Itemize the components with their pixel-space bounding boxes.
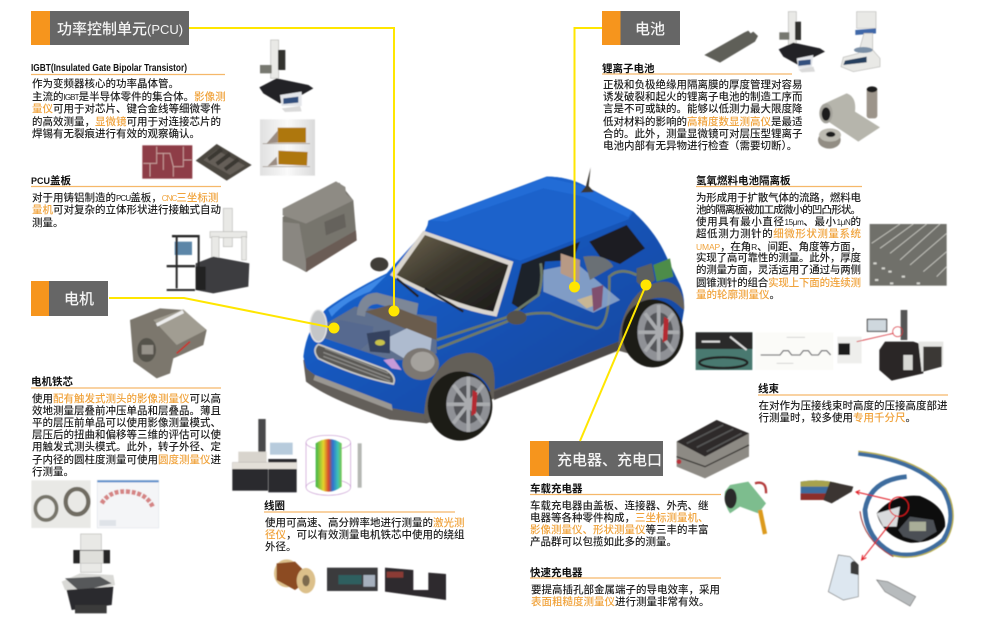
section: battery — [569, 11, 947, 301]
on-board charger in car — [637, 258, 673, 288]
harness subheading: 线束 — [758, 382, 779, 395]
leader line: battery — [569, 28, 602, 292]
fuel cell text: UMAP，在角R、间距、角度等方面， — [696, 240, 861, 253]
fuel cell text: 量的轮廓测量仪。 — [696, 288, 780, 301]
side mirror — [507, 311, 527, 325]
lithium ion text: 电池内部有无异物进行检查（需要切断）。 — [603, 139, 797, 152]
solder image — [260, 119, 315, 176]
coil text: 使用可高速、高分辨率地进行测量的激光测 — [265, 516, 464, 529]
separator roll — [819, 93, 880, 142]
IGBT text: 作为变频器核心的功率晶体管。 — [32, 77, 179, 90]
motor core subheading: 电机铁芯 — [31, 375, 73, 388]
PCU cover text: 量机可对复杂的立体形状进行接触式自动 — [32, 203, 221, 216]
PCU cover text: 对于用铸铝制造的PCU盖板，CNC三坐标测 — [32, 191, 218, 204]
contour gauge photo — [696, 332, 752, 370]
hood highlight — [328, 275, 387, 317]
charger unit — [677, 420, 749, 478]
onboard charger text: 电器等各种零件构成，三坐标测量机、 — [530, 511, 708, 524]
vision measuring machine — [62, 534, 115, 613]
wipers — [397, 278, 463, 312]
lithium ion text: 诱发破裂和起火的锂离子电池的制造工序而 — [603, 90, 802, 103]
icons: battery images — [704, 12, 947, 286]
coil text — [265, 516, 465, 553]
microscope — [779, 12, 825, 72]
fuel cell text: 实现了高可靠性的测量。此外，厚度 — [696, 251, 862, 264]
wire coil — [274, 559, 315, 593]
windshield frame — [390, 231, 513, 317]
left headlight — [310, 310, 327, 342]
fuel cell text: 的测量方面，灵活运用了通过与两侧 — [696, 263, 861, 276]
onboard charger text — [530, 499, 709, 548]
quick charger text — [531, 583, 720, 608]
rear window — [589, 225, 645, 264]
leader line: PCU — [189, 28, 400, 316]
roof highlight — [430, 177, 632, 222]
lithium ion text: 合的。此外，测量显微镜可对层压型锂离子 — [603, 127, 803, 140]
PCU heading: 功率控制单元(PCU) — [57, 21, 183, 38]
coil text: 外径。 — [265, 540, 296, 553]
fuel cell text: 圆锥测针的组合实现上下面的连续测 — [696, 276, 861, 289]
contour profile plot — [755, 332, 833, 370]
leader line: charger — [580, 280, 652, 441]
IGBT text: 的高效测量，显微镜可用于对连接芯片的 — [32, 115, 221, 128]
IGBT text: 主流的IGBT是半导体零件的集合体。影像测 — [32, 90, 226, 103]
fuel cell text: 池的隔离板被加工成微小的凹凸形状。 — [696, 203, 861, 216]
front wheel — [428, 371, 492, 441]
lithium ion text: 低对材料的影响的高精度数显测高仪是最适 — [603, 115, 803, 128]
separator plate image — [870, 224, 947, 286]
harness text: 行测量时，较多使用专用千分尺。 — [758, 411, 916, 424]
height gauge — [841, 12, 880, 72]
roundness cylinder plot — [306, 435, 362, 495]
battery cell — [704, 31, 758, 63]
right headlight — [402, 348, 439, 380]
motor core text: 使用配有触发式测头的影像测量仪可以高 — [32, 392, 221, 405]
battery heading: 电池 — [635, 21, 665, 38]
icons: motor images — [31, 308, 446, 613]
charger heading — [530, 441, 663, 476]
IGBT subheading: IGBT(Insulated Gate Bipolar Transistor) — [31, 62, 187, 74]
separator tube — [867, 86, 877, 118]
red callouts — [856, 490, 909, 560]
harness loop — [858, 451, 953, 557]
motor core text: 效地测量层叠前冲压单品和层叠品。薄且 — [32, 404, 221, 417]
micrometer photo — [877, 496, 945, 543]
onboard charger text: 影像测量仪、形状测量仪等三丰的丰富 — [530, 523, 708, 536]
probe closeup — [837, 337, 862, 363]
CMM machine — [167, 208, 249, 293]
PCU cover part — [283, 181, 357, 272]
car body — [303, 177, 684, 414]
grille — [315, 344, 394, 384]
engine bay — [320, 293, 437, 370]
motor core text: 用触发式测头模式。此外，转子外径、定 — [32, 440, 221, 453]
battery heading — [602, 11, 680, 45]
coil text: 径仪，可以有效测量电机铁芯中使用的绕组 — [265, 528, 465, 541]
motor heading — [31, 281, 108, 316]
front bumper — [305, 367, 425, 422]
motor core text: 平的层压前单品可以使用影像测量模式、 — [32, 416, 221, 429]
section: charger — [530, 280, 766, 608]
car underbody — [303, 310, 623, 423]
fuel cell subheading: 氢氧燃料电池隔离板 — [696, 174, 791, 187]
separator disc — [818, 128, 841, 149]
PCU cover subheading: PCU盖板 — [31, 174, 72, 187]
fuel cell text: 为形成用于扩散气体的流路，燃料电 — [696, 191, 862, 204]
lithium ion text: 言是不可或缺的。能够以低测力最大限度降 — [603, 102, 803, 115]
motor core text: 行测量。 — [32, 465, 74, 478]
measuring microscope — [259, 40, 313, 112]
PCU cover text: 测量。 — [32, 216, 64, 229]
charger heading: 充电器、充电口 — [557, 452, 662, 469]
lithium ion text: 正极和负极绝缘用隔离膜的厚度管理对容易 — [603, 78, 802, 91]
IGBT module — [196, 144, 252, 181]
icons: harness and contour images — [696, 310, 953, 606]
rear wheel — [622, 299, 683, 367]
icons: PCU images — [142, 40, 357, 293]
antenna — [581, 167, 594, 193]
harness crimps — [801, 480, 853, 503]
PCU heading — [31, 11, 189, 45]
contour measuring machine — [867, 310, 943, 381]
leader line: motor — [109, 298, 340, 334]
car illustration — [303, 167, 684, 441]
crimp anvil drawing — [877, 580, 916, 606]
quick charger subheading: 快速充电器 — [530, 566, 583, 579]
lithium ion subheading: 锂离子电池 — [602, 62, 655, 75]
front fender — [424, 353, 495, 423]
fuel cell text — [696, 191, 862, 301]
motor heading: 电机 — [64, 291, 94, 308]
motor core text: 层压后的扭曲和偏移等三维的评估可以使 — [32, 428, 221, 441]
IGBT text: 量仪可用于对芯片、键合金线等细微零件 — [32, 102, 221, 115]
motor core text — [32, 392, 222, 478]
stator software screen — [97, 480, 159, 528]
section: PCU — [31, 11, 400, 316]
roundness tester — [232, 419, 297, 492]
IGBT text — [32, 77, 226, 140]
laser scan micrometer — [327, 568, 446, 600]
stator rings photo — [31, 480, 91, 528]
sill — [494, 342, 618, 400]
icons: charger images — [677, 420, 766, 534]
harness text: 在对作为压接线束时高度的压接高度部进 — [758, 399, 948, 412]
roof — [427, 177, 633, 261]
coil subheading: 线圈 — [264, 499, 285, 512]
lithium ion text — [603, 78, 803, 152]
side window — [512, 242, 580, 310]
callout arrow — [857, 333, 893, 342]
motor part — [130, 308, 207, 378]
crimp terminal drawing — [828, 555, 858, 600]
section: wire harness — [696, 310, 953, 606]
harness text — [758, 399, 948, 424]
section: motor — [31, 281, 465, 613]
onboard charger subheading: 车载充电器 — [530, 482, 583, 495]
windshield — [397, 235, 508, 312]
onboard charger text: 车载充电器由盖板、连接器、外壳、继 — [530, 499, 709, 512]
onboard charger text: 产品群可以包揽如此多的测量。 — [530, 535, 677, 548]
IGBT text: 焊锡有无裂痕进行有效的观察确认。 — [32, 127, 200, 140]
rear fender — [618, 282, 684, 353]
traction battery — [543, 253, 620, 313]
fuel cell text: 超低测力测针的细微形状测量系统 — [696, 227, 862, 240]
cables — [437, 263, 637, 349]
charging connector — [725, 482, 766, 534]
quick charger text: 表面粗糙度测量仪进行测量非常有效。 — [531, 595, 710, 608]
fuel cell text: 使用具有最小直径15μm、最小1μN的 — [696, 215, 861, 228]
circuit pattern — [142, 145, 192, 179]
left mirror — [370, 257, 388, 271]
quick charger text: 要提高插孔部金属端子的导电效率，采用 — [531, 583, 720, 596]
motor core text: 子内径的圆柱度测量可使用圆度测量仪进 — [32, 453, 222, 466]
PCU cover text — [32, 191, 221, 229]
